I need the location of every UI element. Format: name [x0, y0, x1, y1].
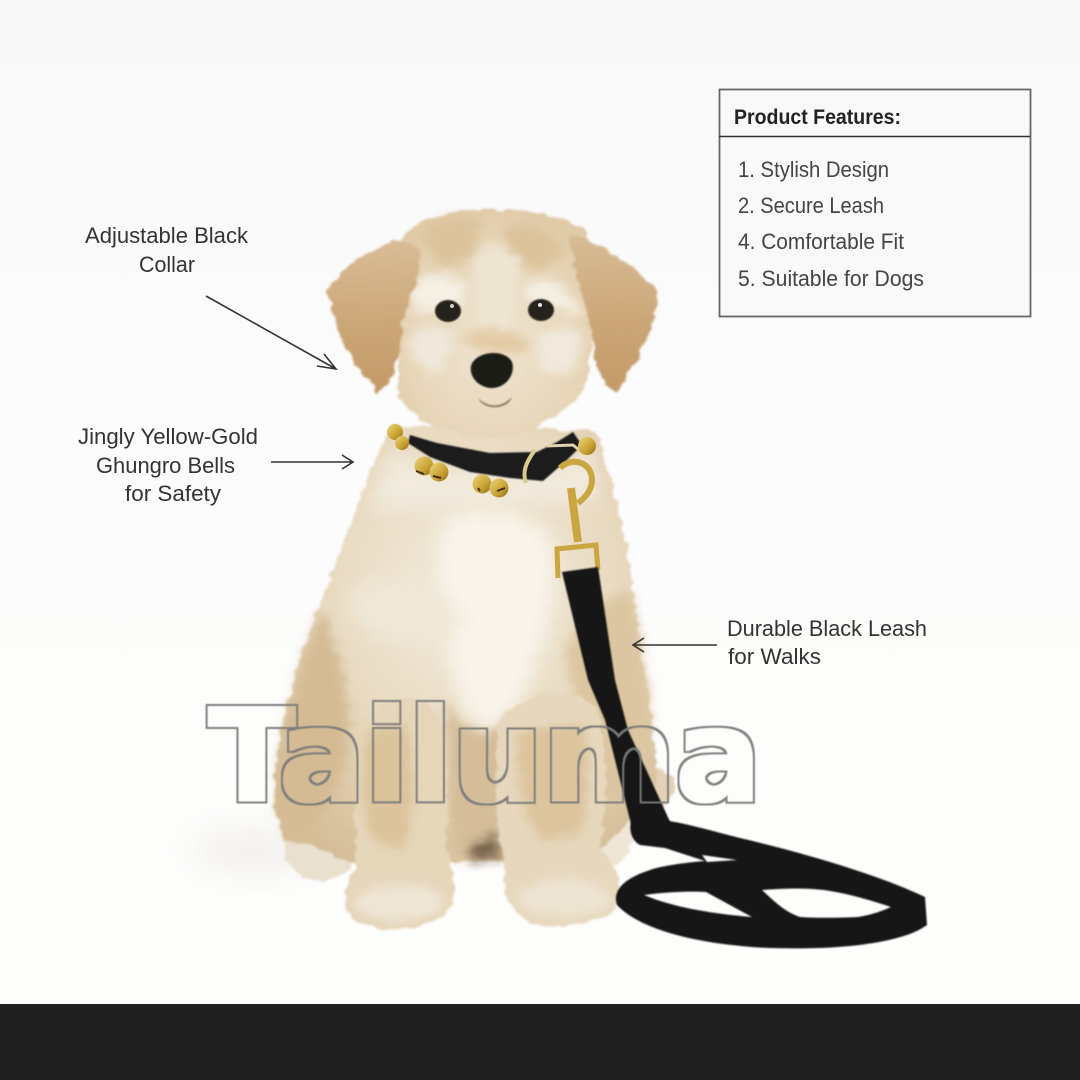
front left leg [345, 699, 454, 929]
watermark: Tailuma: Tailuma [208, 682, 762, 830]
collar [408, 432, 583, 483]
leash loop [616, 819, 927, 948]
bells label [78, 424, 258, 506]
rear left paw [284, 810, 355, 881]
footer bar [0, 1004, 1080, 1080]
collar label: Collar [139, 252, 195, 277]
callout: durable leash [633, 616, 927, 669]
callout: ghungro bells [78, 424, 353, 506]
face details [435, 299, 554, 407]
right eye [528, 299, 554, 321]
bells label: Jingly Yellow-Gold [78, 424, 258, 449]
leash label [727, 616, 927, 669]
leash strap [562, 567, 672, 828]
leash snap hook [557, 462, 598, 578]
panel heading: Product Features: [734, 106, 901, 129]
nose [471, 353, 513, 388]
collar label [85, 223, 249, 277]
features list: 4. Comfortable Fit [738, 229, 904, 254]
bells label: for Safety [125, 481, 221, 506]
left eye [435, 300, 461, 322]
puppy fur [274, 210, 674, 929]
callout: adjustable black collar [85, 223, 336, 369]
illustration: puppy [274, 210, 927, 948]
arrow to bells [271, 455, 353, 469]
ghungro bells [387, 424, 596, 498]
features list [738, 157, 924, 291]
features list: 1. Stylish Design [738, 157, 889, 182]
leash label: for Walks [728, 644, 821, 669]
collar label: Adjustable Black [85, 223, 249, 248]
puppy tail [636, 768, 674, 808]
front right leg [495, 692, 620, 926]
bells label: Ghungro Bells [96, 453, 235, 478]
left ear [327, 243, 420, 393]
features list: 5. Suitable for Dogs [738, 266, 924, 291]
white gaps inside leash loop [644, 855, 891, 918]
panel: product features [719, 90, 1030, 316]
features list: 2. Secure Leash [738, 193, 884, 218]
puppy body [274, 425, 656, 862]
dog floor shadow [190, 826, 320, 874]
right ear [570, 236, 658, 392]
arrow to collar [206, 296, 336, 369]
rear right paw [590, 795, 634, 866]
head fur [397, 210, 591, 438]
arrow to leash [633, 638, 717, 652]
black leash [562, 567, 927, 948]
leash label: Durable Black Leash [727, 616, 927, 641]
